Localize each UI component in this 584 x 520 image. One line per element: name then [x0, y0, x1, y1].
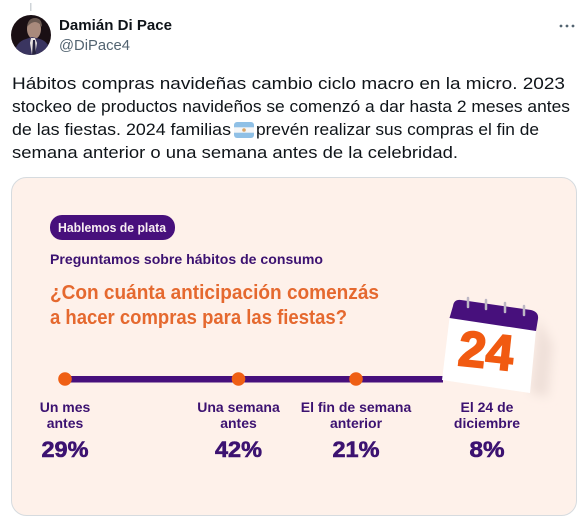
label: un mes antes 29% — [40, 399, 90, 462]
badge: Hablemos de plata: Hablemos de plata — [58, 221, 167, 235]
label: el 24 de diciembre 8%: El 24 de — [461, 399, 514, 415]
label: el 24 de diciembre 8%: 8% — [470, 437, 504, 462]
label: el fin de semana anterior 21%: 21% — [332, 437, 380, 462]
label: una semana antes 42%: 42% — [215, 437, 262, 462]
label: una semana antes 42%: Una semana — [197, 399, 280, 415]
icon: more menu — [560, 25, 574, 27]
timeline — [58, 372, 443, 386]
label: una semana antes 42% — [197, 399, 280, 462]
label: el 24 de diciembre 8% — [454, 399, 520, 462]
tweet text: prevén realizar sus compras el fin de — [256, 120, 539, 139]
panel: infographic card — [12, 178, 576, 516]
question heading: a hacer compras para las fiestas? — [50, 307, 347, 329]
author name: Damián Di Pace — [59, 17, 172, 34]
label: el fin de semana anterior 21%: El fin de semana — [301, 399, 411, 415]
tweet text: stockeo de productos navideños se comenzó a dar hasta 2 meses antes — [12, 97, 570, 116]
label: el 24 de diciembre 8%: diciembre — [454, 415, 520, 431]
tweet header — [11, 3, 574, 56]
author handle: @DiPace4 — [59, 37, 130, 54]
label: una semana antes 42%: antes — [220, 415, 257, 431]
marker: una semana antes — [232, 372, 245, 386]
label: un mes antes 29%: Un mes — [40, 399, 90, 415]
label: un mes antes 29%: 29% — [42, 437, 88, 462]
label: el fin de semana anterior 21%: anterior — [330, 415, 383, 431]
badge: Hablemos de plata — [50, 215, 175, 240]
tweet text: semana anterior o una semana antes de la celebridad. — [12, 143, 458, 162]
tweet text: de las fiestas. 2024 familias — [12, 120, 231, 139]
label: un mes antes 29%: antes — [47, 415, 83, 431]
tweet text — [12, 74, 570, 162]
icon: calendar 24 — [442, 298, 553, 397]
icon: argentina flag — [234, 122, 254, 138]
marker: un mes antes — [58, 372, 72, 386]
icon: calendar 24: 24 — [456, 320, 517, 382]
label: el fin de semana anterior 21% — [301, 399, 411, 462]
tweet text: Hábitos compras navideñas cambio ciclo macro en la micro. 2023 — [12, 74, 565, 93]
subheading: Preguntamos sobre hábitos de consumo — [50, 251, 323, 267]
icon: avatar — [11, 15, 51, 56]
question heading — [50, 282, 379, 329]
marker: el fin de semana anterior — [349, 372, 363, 386]
question heading: ¿Con cuánta anticipación comenzás — [50, 282, 379, 304]
